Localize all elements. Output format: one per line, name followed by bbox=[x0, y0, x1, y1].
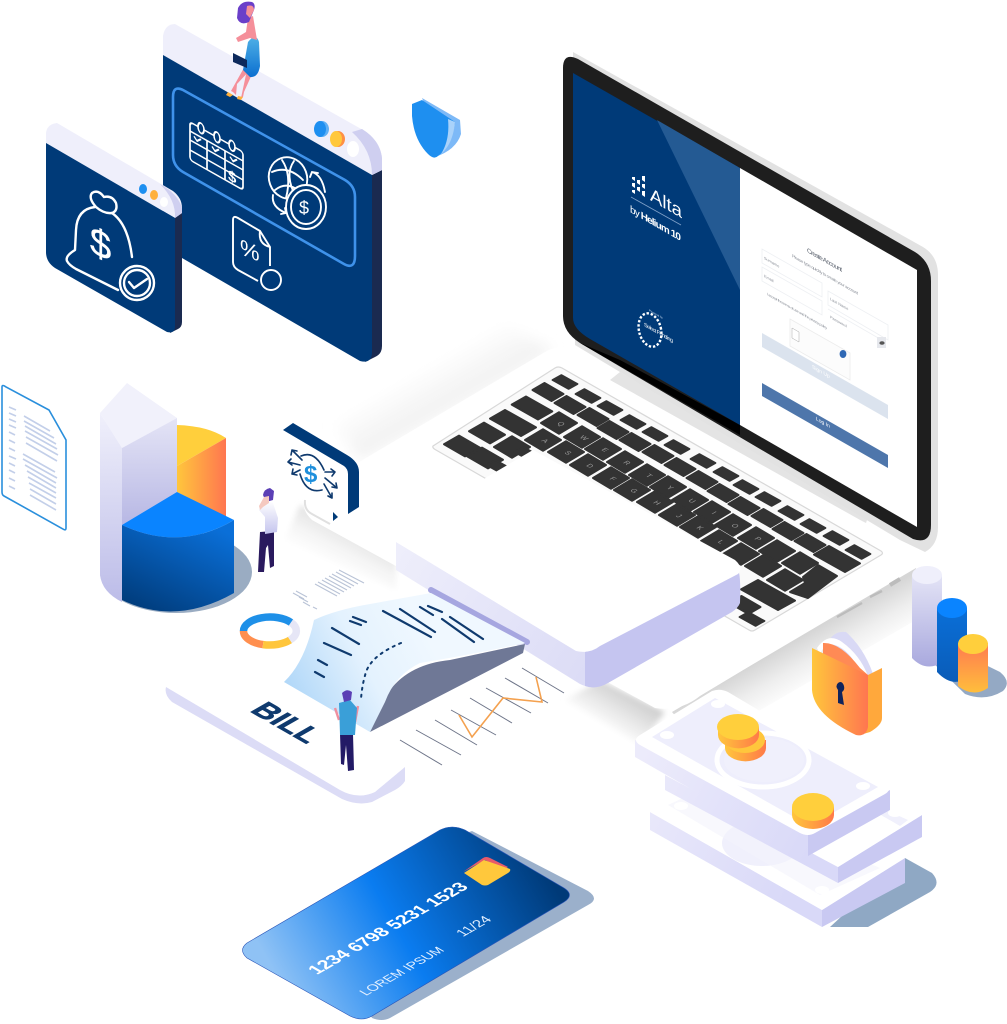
lavender cylinder bbox=[912, 566, 942, 667]
key legends: P bbox=[752, 536, 763, 542]
key legends: G bbox=[628, 488, 639, 494]
icon: percent document: % bbox=[240, 234, 260, 267]
window title bar bbox=[46, 123, 182, 218]
icon: exchange arrows bbox=[288, 450, 337, 498]
create account form: Email bbox=[764, 273, 774, 283]
card holder: LOREM IPSUM bbox=[356, 945, 448, 997]
receipt print lines bbox=[315, 606, 483, 677]
logo: Select Funding bbox=[635, 308, 673, 349]
key legends: Q bbox=[555, 421, 566, 428]
receipt bbox=[284, 590, 527, 732]
create account form: Password bbox=[830, 314, 847, 329]
key legends: U bbox=[686, 498, 697, 504]
keys: function row bbox=[552, 375, 871, 559]
key legends: H bbox=[651, 500, 662, 506]
orange cylinder bbox=[958, 634, 988, 693]
logo: Select Funding: Powered by bbox=[649, 308, 663, 320]
printer block bbox=[396, 450, 740, 687]
money stack bbox=[635, 690, 937, 927]
icon: security shield bbox=[412, 98, 461, 158]
card expiry: 11/24 bbox=[452, 913, 495, 938]
panel: small window with money bag: $ bbox=[90, 219, 111, 270]
small bar chart cylinders bbox=[912, 566, 1007, 697]
money shadow bbox=[830, 858, 937, 927]
card chip bbox=[463, 857, 510, 886]
create account form: I accept the terms of use and the privacy policy bbox=[767, 291, 827, 330]
keys: number row bbox=[532, 383, 860, 572]
panel: large window with calendar and currency icons bbox=[163, 24, 382, 362]
key legends: T bbox=[643, 473, 654, 479]
icon: calendar bbox=[190, 117, 243, 192]
blue pie slice bbox=[122, 492, 234, 611]
key legends: R bbox=[621, 460, 632, 466]
icon: woman sitting with laptop bbox=[226, 2, 260, 100]
man reading bill bbox=[335, 690, 358, 771]
create account form: Last Name bbox=[830, 296, 849, 312]
bottom bill bbox=[650, 765, 905, 927]
yellow pie slice bbox=[177, 425, 226, 517]
logo: Alta by Helium 10: Alta bbox=[650, 184, 683, 223]
create account form: Surname bbox=[764, 255, 780, 269]
icon: money bag bbox=[67, 192, 154, 300]
laptop base bbox=[304, 347, 917, 709]
create account form: Sign Up bbox=[812, 364, 830, 380]
create account form: Log In bbox=[816, 416, 830, 430]
blue cylinder bbox=[937, 598, 967, 682]
document text lines bbox=[9, 407, 58, 510]
create account form: I'm not a robot bbox=[800, 332, 826, 352]
BILL label: BILL bbox=[243, 698, 330, 748]
keyboard bbox=[433, 367, 882, 631]
panel: currency exchange card: $ bbox=[304, 461, 318, 488]
keys: letter rows bbox=[444, 396, 837, 626]
logo: Alta by Helium 10: by Helium 10 bbox=[630, 204, 681, 244]
highlighted panel outline bbox=[173, 89, 355, 266]
chart shadow bbox=[100, 531, 252, 613]
laptop ports bbox=[837, 579, 900, 617]
laptop lid with screen bbox=[563, 52, 938, 552]
key legends: S bbox=[562, 450, 573, 456]
padlock bbox=[812, 632, 882, 735]
icon: globe with currency bbox=[263, 152, 326, 229]
key legends: O bbox=[729, 523, 740, 530]
card shadow bbox=[362, 831, 594, 1020]
credit card bbox=[242, 827, 594, 1020]
window dots bbox=[314, 121, 359, 157]
key legends: A bbox=[539, 438, 550, 444]
window dots bbox=[139, 184, 168, 207]
key legends: K bbox=[694, 525, 705, 531]
key legends: D bbox=[584, 463, 595, 469]
laptop hinge bbox=[610, 372, 868, 523]
bar and pie chart bbox=[100, 383, 252, 613]
laptop shadows bbox=[285, 325, 916, 745]
bill platform edge bbox=[166, 687, 405, 803]
key legends: W bbox=[577, 435, 590, 442]
key legends: L bbox=[716, 540, 725, 545]
man looking at chart bbox=[258, 488, 278, 572]
icon: calendar: $ bbox=[228, 166, 236, 188]
top bill bbox=[635, 690, 890, 856]
key legends bbox=[539, 421, 763, 545]
key legends: Y bbox=[664, 485, 675, 491]
create account form: Create Account bbox=[807, 247, 842, 274]
key legends: F bbox=[607, 476, 617, 482]
panel: small window with money bag bbox=[46, 123, 182, 333]
small document thumbnails bbox=[293, 570, 364, 609]
card number: 1234 6798 5231 1523 bbox=[303, 880, 473, 977]
line chart bbox=[400, 668, 564, 765]
create account form bbox=[762, 247, 888, 468]
icon: globe with currency: $ bbox=[299, 198, 309, 218]
icon: coins bbox=[717, 714, 834, 829]
create account form: Please type quickly to create your account bbox=[792, 253, 859, 296]
key legends: J bbox=[674, 514, 683, 519]
logo: Alta by Helium 10 bbox=[630, 176, 683, 244]
logo: Select Funding: Select Funding bbox=[644, 322, 673, 344]
key legends: E bbox=[599, 447, 610, 453]
icon: percent document bbox=[233, 217, 281, 290]
create account form: Already have an account? bbox=[806, 407, 844, 434]
panel: specification document bbox=[2, 386, 66, 530]
donut chart bbox=[243, 617, 296, 645]
middle bill bbox=[665, 730, 922, 883]
key legends: I bbox=[709, 511, 717, 516]
panel: currency exchange card bbox=[283, 423, 359, 521]
window title bar bbox=[163, 24, 382, 175]
